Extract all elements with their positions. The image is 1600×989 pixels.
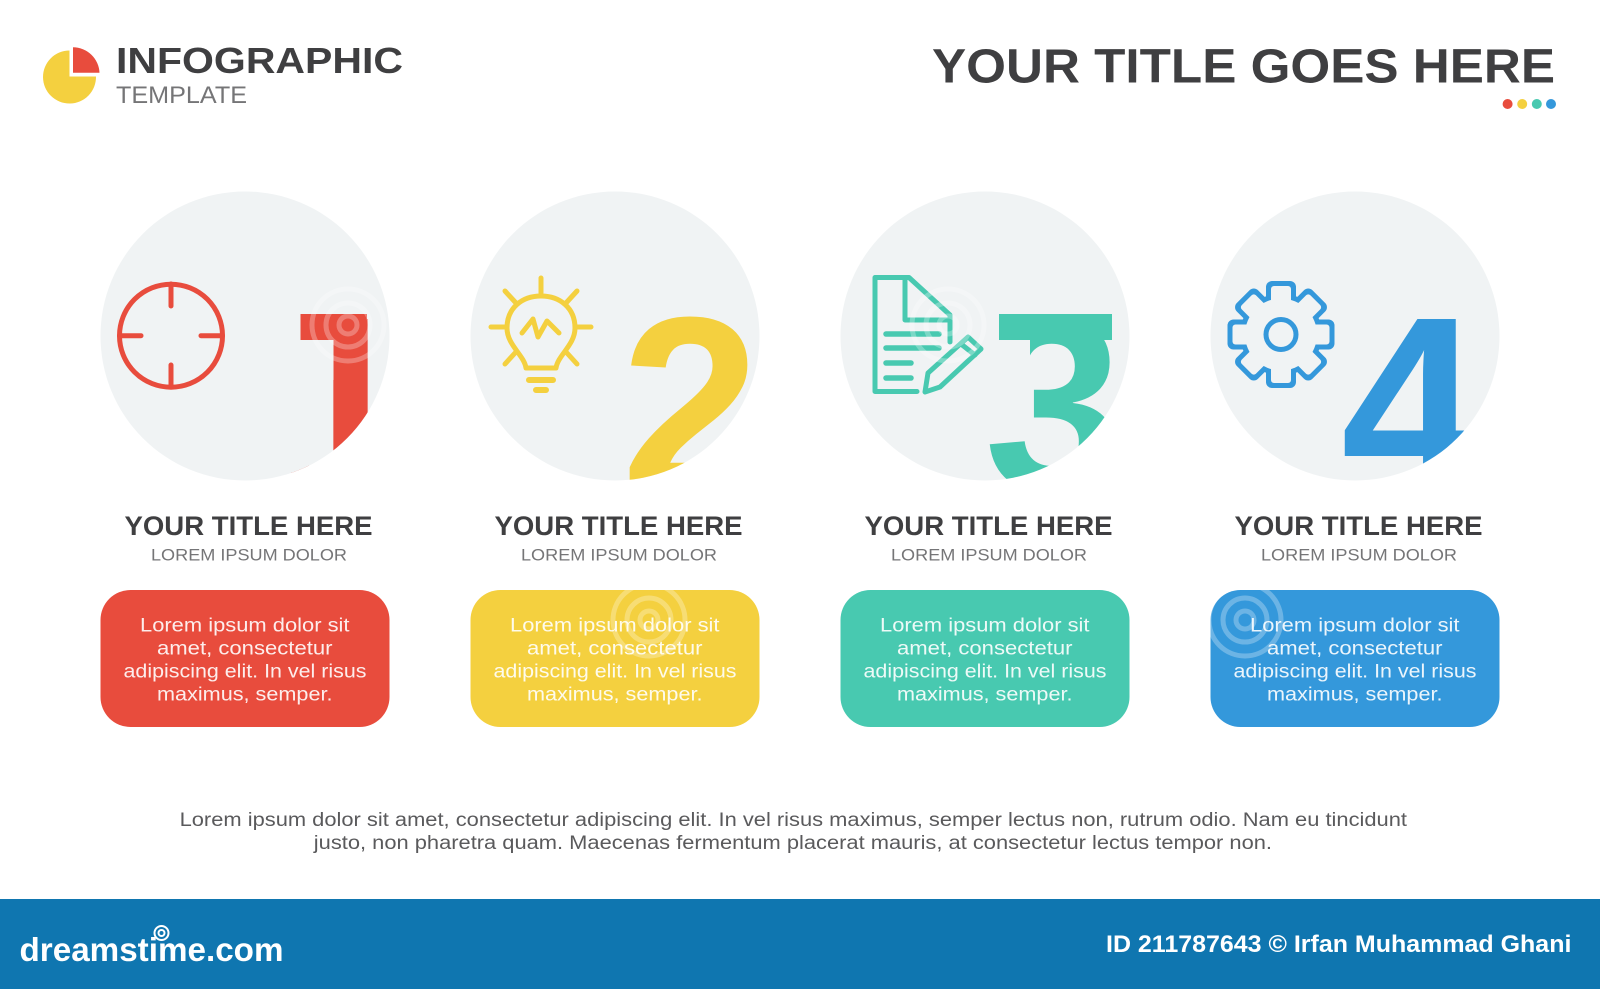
icon: document and pencil <box>875 278 981 392</box>
panel: step 4 <box>1210 192 1500 727</box>
step 2 box: Lorem ipsum dolor sit <box>510 616 720 637</box>
background circle 3 <box>840 192 1130 480</box>
step 4 box: maximus, semper. <box>1267 685 1442 706</box>
numeral 1: 1 <box>275 265 414 544</box>
main title: YOUR TITLE GOES HERE <box>932 40 1555 94</box>
footer description: justo, non pharetra quam. Maecenas fermentum placerat mauris, at consectetur lectus tempor non. <box>313 833 1272 854</box>
panel: step 2 <box>470 192 760 727</box>
panel: step 3 <box>840 192 1130 727</box>
step 2 box: adipiscing elit. In vel risus <box>494 662 736 683</box>
background circle 1 <box>100 192 390 480</box>
step 3 box: adipiscing elit. In vel risus <box>864 662 1106 683</box>
step 3 subtitle: LOREM IPSUM DOLOR <box>891 546 1087 564</box>
numeral 3: 3 <box>984 265 1123 544</box>
background circle 4 <box>1210 192 1500 480</box>
footer description: Lorem ipsum dolor sit amet, consectetur adipiscing elit. In vel risus maximus, semper lectus non, rutrum odio. Nam eu tincidunt <box>180 810 1408 831</box>
numeral 1 <box>291 314 368 473</box>
step 3 box: maximus, semper. <box>897 685 1072 706</box>
watermark swirls <box>312 289 1281 656</box>
footer brand: dreamstime.com <box>20 931 284 968</box>
step 1 box: Lorem ipsum dolor sit <box>140 616 350 637</box>
step 4 title: YOUR TITLE HERE <box>1234 511 1482 541</box>
footer description <box>180 810 1408 854</box>
step 3 title: YOUR TITLE HERE <box>864 511 1112 541</box>
step 1 title: YOUR TITLE HERE <box>124 511 372 541</box>
numeral 2: 2 <box>621 265 760 544</box>
step 4 subtitle: LOREM IPSUM DOLOR <box>1261 546 1457 564</box>
footer bar <box>0 899 1600 989</box>
step 2 box <box>470 590 760 727</box>
step 4 box <box>1210 590 1500 727</box>
numeral 4: 4 <box>1341 265 1480 544</box>
step 4 box: amet, consectetur <box>1267 639 1443 660</box>
step 2 box: amet, consectetur <box>527 639 703 660</box>
step 1 box: adipiscing elit. In vel risus <box>124 662 366 683</box>
step 3 box: amet, consectetur <box>897 639 1073 660</box>
step 4 box: Lorem ipsum dolor sit <box>1250 616 1460 637</box>
step 3 box <box>840 590 1130 727</box>
colour dots <box>1503 99 1556 109</box>
step 2 box: maximus, semper. <box>527 685 702 706</box>
logo: pie chart <box>43 47 100 104</box>
step 1 box: amet, consectetur <box>157 639 333 660</box>
step 3 box: Lorem ipsum dolor sit <box>880 616 1090 637</box>
icon: gear <box>1228 281 1334 388</box>
logo heading: INFOGRAPHIC <box>116 40 403 81</box>
step 1 box: maximus, semper. <box>157 685 332 706</box>
panel: step 1 <box>100 192 414 727</box>
step 2 title: YOUR TITLE HERE <box>494 511 742 541</box>
step 1 box <box>100 590 390 727</box>
icon: light bulb <box>491 278 591 390</box>
footer credit: ID 211787643 © Irfan Muhammad Ghani <box>1106 931 1571 958</box>
numeral 3 <box>990 314 1112 479</box>
step 4 box: adipiscing elit. In vel risus <box>1234 662 1476 683</box>
step 2 subtitle: LOREM IPSUM DOLOR <box>521 546 717 564</box>
logo subheading: TEMPLATE <box>116 82 247 109</box>
step 1 subtitle: LOREM IPSUM DOLOR <box>151 546 347 564</box>
icon: target <box>120 284 222 387</box>
background circle 2 <box>470 192 760 480</box>
